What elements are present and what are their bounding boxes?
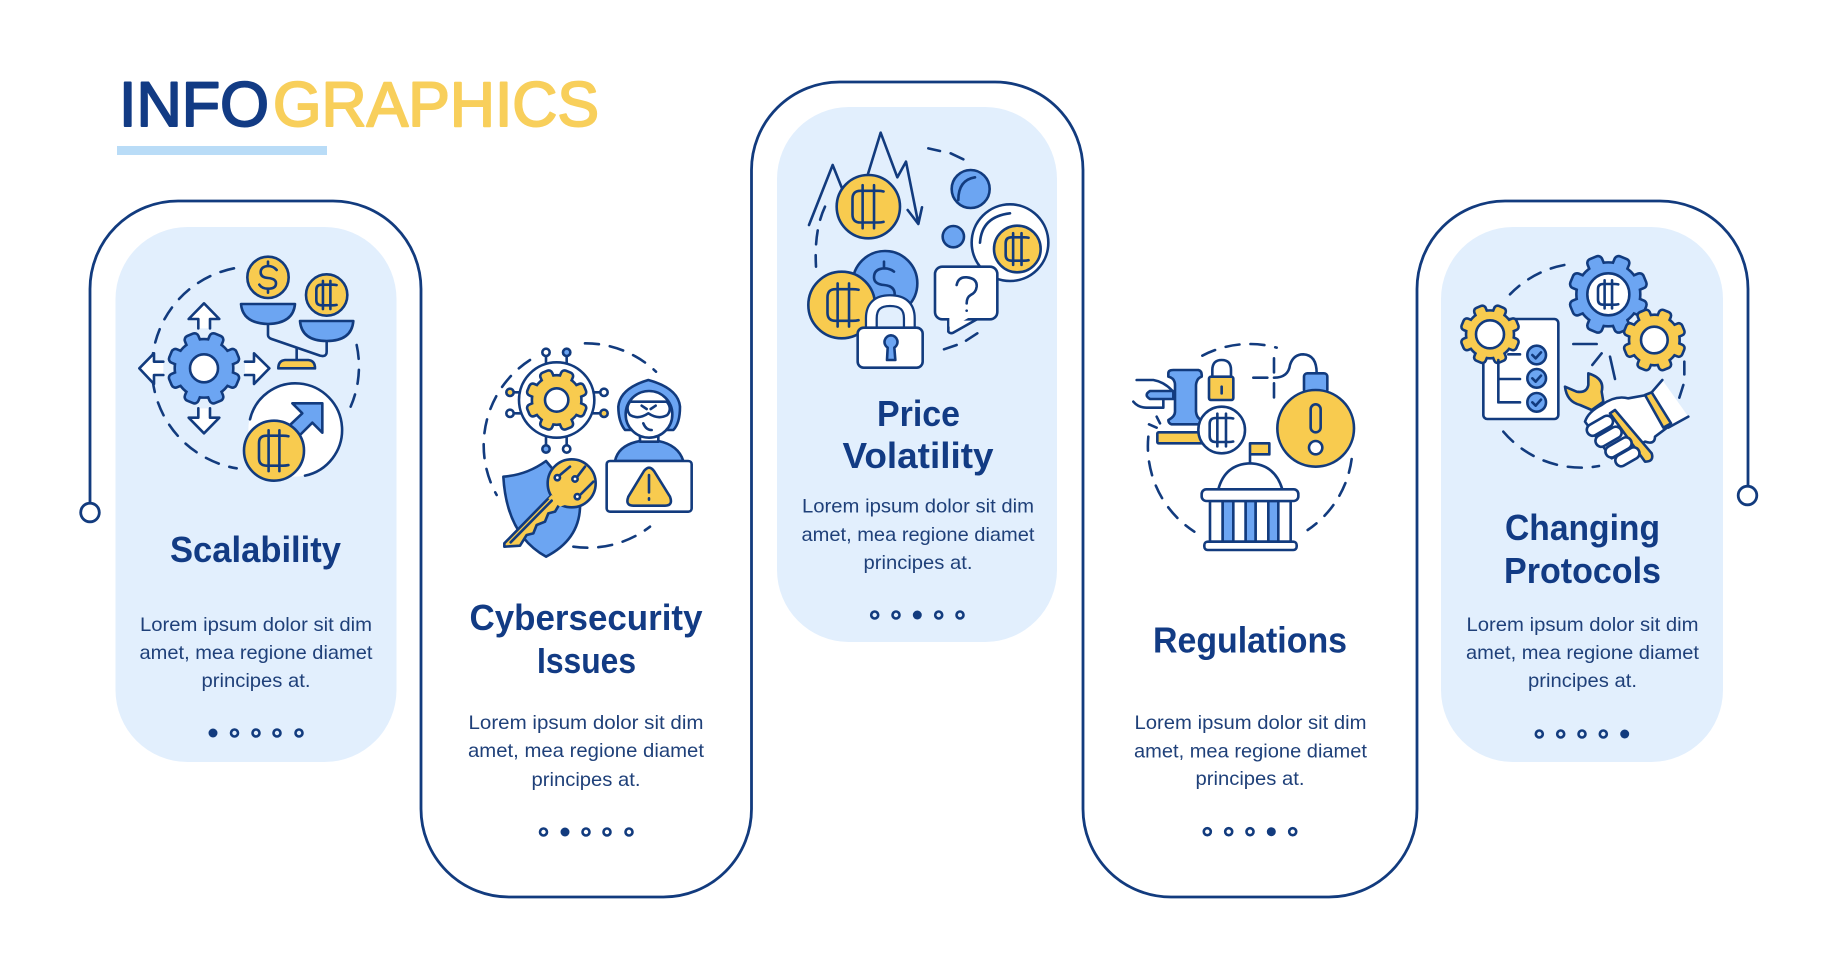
text: cybersecurity body	[468, 712, 705, 791]
heading: price volatility: Volatility	[842, 435, 994, 476]
panel: regulations	[1133, 344, 1368, 836]
text: cybersecurity body: Lorem ipsum dolor sit dim	[468, 712, 704, 734]
outline end circle right	[1738, 486, 1757, 505]
icon: cybersecurity	[484, 343, 692, 557]
text: changing protocols body: amet, mea regione diamet	[1466, 642, 1700, 664]
connecting outline	[90, 82, 1748, 897]
title: INFO	[119, 70, 269, 140]
title underline	[117, 146, 327, 155]
icon: scalability	[139, 257, 359, 481]
heading: changing protocols	[1504, 507, 1661, 591]
heading: cybersecurity issues: Issues	[537, 640, 636, 681]
dots: step 3	[871, 610, 964, 620]
text: regulations body: principes at.	[1196, 768, 1304, 790]
panel: scalability	[116, 227, 396, 762]
heading: cybersecurity issues: Cybersecurity	[470, 597, 702, 638]
outline end circle left	[81, 503, 99, 522]
text: cybersecurity body: principes at.	[532, 769, 640, 791]
panel: price volatility	[777, 107, 1057, 642]
text: price volatility body	[802, 496, 1035, 574]
text: changing protocols body: Lorem ipsum dolor sit dim	[1466, 614, 1698, 636]
text: cybersecurity body: amet, mea regione diamet	[468, 740, 705, 762]
title	[119, 70, 599, 140]
text: regulations body: Lorem ipsum dolor sit dim	[1134, 712, 1366, 734]
text: price volatility body: principes at.	[864, 552, 972, 574]
panel: cybersecurity	[468, 343, 705, 836]
text: scalability body: amet, mea regione diamet	[140, 642, 373, 664]
heading: cybersecurity issues	[470, 597, 702, 681]
dots: step 5	[1536, 730, 1629, 738]
text: changing protocols body: principes at.	[1528, 670, 1637, 692]
dots: step 1	[208, 728, 302, 738]
panel: changing protocols	[1441, 227, 1723, 762]
text: scalability body: principes at.	[202, 670, 310, 692]
title: GRAPHICS	[273, 70, 599, 140]
heading: regulations: Regulations	[1153, 620, 1347, 660]
heading: scalability: Scalability	[170, 529, 341, 570]
heading: changing protocols: Protocols	[1504, 550, 1661, 591]
heading: price volatility	[842, 393, 994, 476]
text: regulations body	[1134, 712, 1368, 790]
text: price volatility body: Lorem ipsum dolor sit dim	[802, 496, 1034, 518]
heading: price volatility: Price	[877, 393, 960, 434]
icon: regulations	[1133, 344, 1354, 550]
heading: changing protocols: Changing	[1505, 507, 1660, 548]
icon: price volatility	[808, 133, 1048, 368]
text: scalability body: Lorem ipsum dolor sit dim	[140, 614, 372, 636]
text: changing protocols body	[1466, 614, 1700, 692]
text: scalability body	[140, 614, 373, 692]
icon: changing protocols	[1462, 256, 1688, 468]
dots: step 4	[1204, 827, 1296, 836]
text: regulations body: amet, mea regione diamet	[1134, 740, 1368, 762]
text: price volatility body: amet, mea regione diamet	[802, 524, 1035, 546]
dots: step 2	[540, 828, 632, 836]
